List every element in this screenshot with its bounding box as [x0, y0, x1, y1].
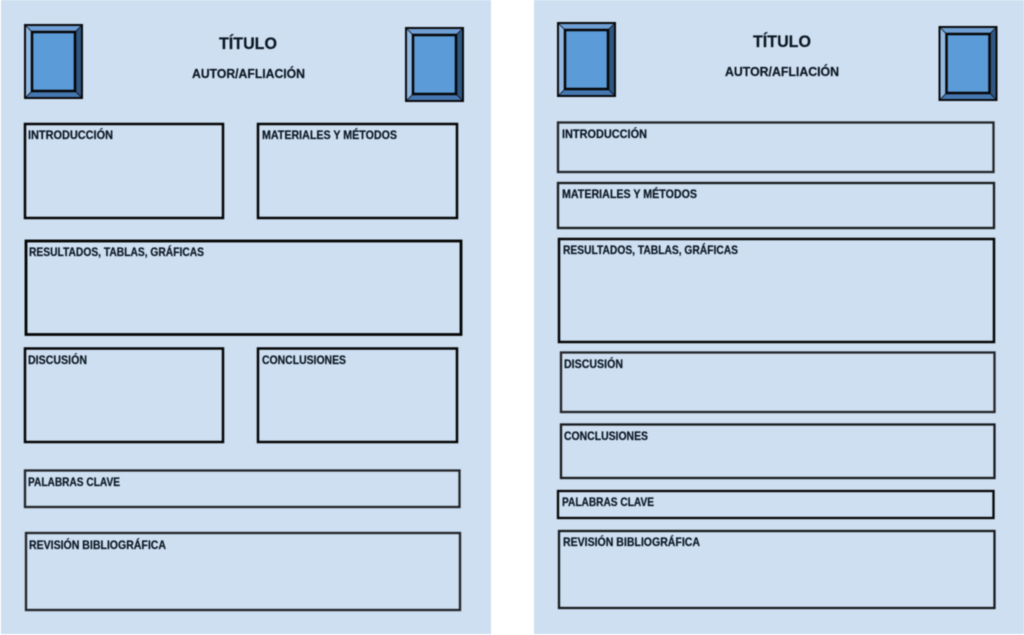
section: discusión: DISCUSIÓN — [28, 354, 87, 367]
icon: right logo placeholder — [405, 27, 464, 102]
section: palabras clave: PALABRAS CLAVE — [562, 497, 654, 509]
section: introducción — [558, 122, 994, 172]
section: palabras clave — [558, 491, 994, 518]
section: discusión — [561, 352, 994, 412]
author and affiliation: AUTOR/AFLIACIÓN — [725, 64, 839, 79]
section: introducción — [25, 124, 223, 218]
icon: left logo placeholder — [24, 24, 83, 99]
section: materiales y métodos — [258, 124, 457, 218]
author and affiliation: AUTOR/AFLIACIÓN — [192, 66, 305, 81]
icon: right logo placeholder — [938, 26, 998, 101]
panel: right poster template — [534, 0, 1024, 634]
section: resultados, tablas, gráficas: RESULTADOS, TABLAS, GRÁFICAS — [563, 244, 738, 257]
section: revisión bibliográfica — [559, 531, 994, 608]
section: introducción: INTRODUCCIÓN — [28, 129, 113, 142]
section: conclusiones — [561, 424, 994, 478]
section: revisión bibliográfica — [26, 533, 460, 610]
section: introducción: INTRODUCCIÓN — [562, 128, 647, 141]
section: conclusiones: CONCLUSIONES — [262, 355, 346, 367]
section: revisión bibliográfica: REVISIÓN BIBLIOGRÁFICA — [29, 539, 166, 552]
title: TÍTULO — [219, 34, 277, 53]
section: resultados, tablas, gráficas — [26, 241, 461, 334]
section: revisión bibliográfica: REVISIÓN BIBLIOGRÁFICA — [563, 536, 700, 549]
section: resultados, tablas, gráficas: RESULTADOS, TABLAS, GRÁFICAS — [29, 246, 204, 259]
section: conclusiones: CONCLUSIONES — [564, 431, 648, 443]
section: materiales y métodos: MATERIALES Y MÉTODOS — [262, 129, 397, 142]
section: discusión — [25, 348, 223, 442]
section: discusión: DISCUSIÓN — [564, 358, 623, 371]
panel: left poster template — [1, 0, 491, 634]
section: resultados, tablas, gráficas — [559, 239, 994, 342]
section: materiales y métodos — [558, 183, 994, 228]
section: palabras clave — [25, 470, 460, 507]
section: conclusiones — [258, 348, 457, 442]
section: materiales y métodos: MATERIALES Y MÉTODOS — [562, 188, 697, 201]
icon: left logo placeholder — [557, 22, 616, 97]
section: palabras clave: PALABRAS CLAVE — [28, 477, 120, 489]
title: TÍTULO — [753, 32, 811, 51]
